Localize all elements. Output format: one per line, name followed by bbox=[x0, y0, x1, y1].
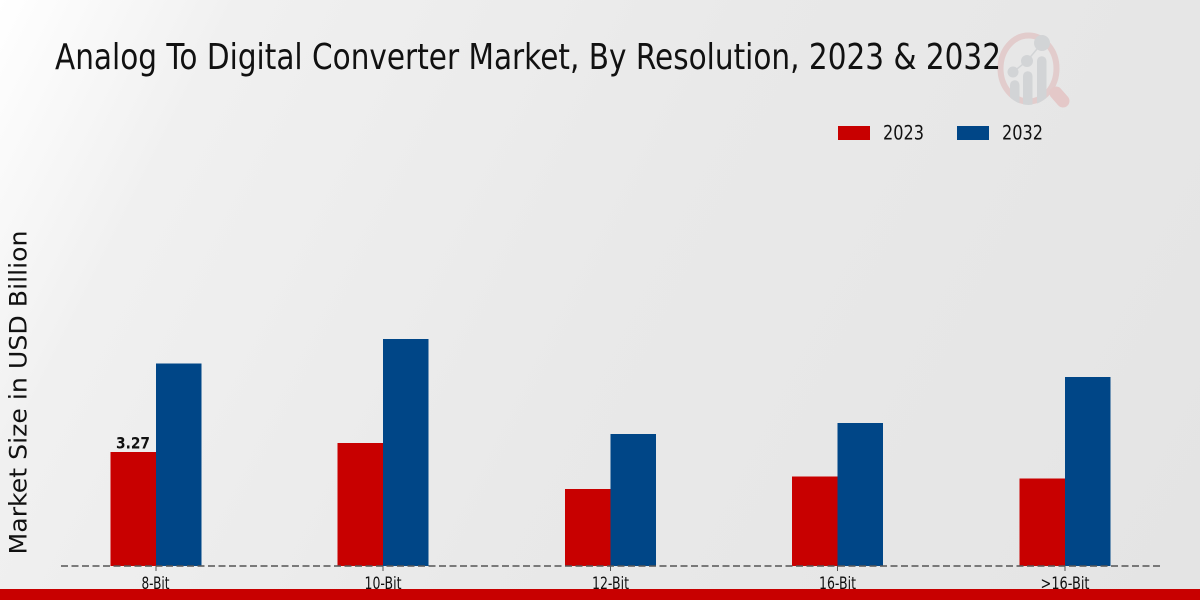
bars: 16-Bit bbox=[792, 423, 883, 566]
footer bar bbox=[0, 589, 1200, 600]
x axis labels: 12-Bit bbox=[592, 574, 629, 593]
legend: 2032 bbox=[1002, 122, 1043, 144]
bars: 12-Bit bbox=[565, 434, 656, 566]
bars: >16-Bit bbox=[1020, 377, 1110, 566]
x axis labels: 8-Bit bbox=[142, 574, 170, 593]
value label: 3.27 bbox=[116, 434, 150, 452]
baseline bbox=[61, 565, 1160, 567]
y axis label: Market Size in USD Billion bbox=[4, 230, 32, 554]
legend: 2023 bbox=[883, 122, 924, 144]
legend bbox=[838, 122, 1043, 144]
x axis labels: 16-Bit bbox=[819, 574, 856, 593]
bars: 10-Bit bbox=[338, 339, 428, 566]
title: Analog To Digital Converter Market, By Resolution, 2023 & 2032 bbox=[55, 37, 1001, 78]
x axis labels bbox=[142, 574, 1090, 593]
bar chart bbox=[61, 339, 1160, 571]
x axis labels: 10-Bit bbox=[364, 574, 402, 593]
watermark logo bbox=[1000, 35, 1063, 110]
bars: 8-Bit bbox=[110, 364, 202, 566]
x axis labels: >16-Bit bbox=[1040, 574, 1090, 593]
